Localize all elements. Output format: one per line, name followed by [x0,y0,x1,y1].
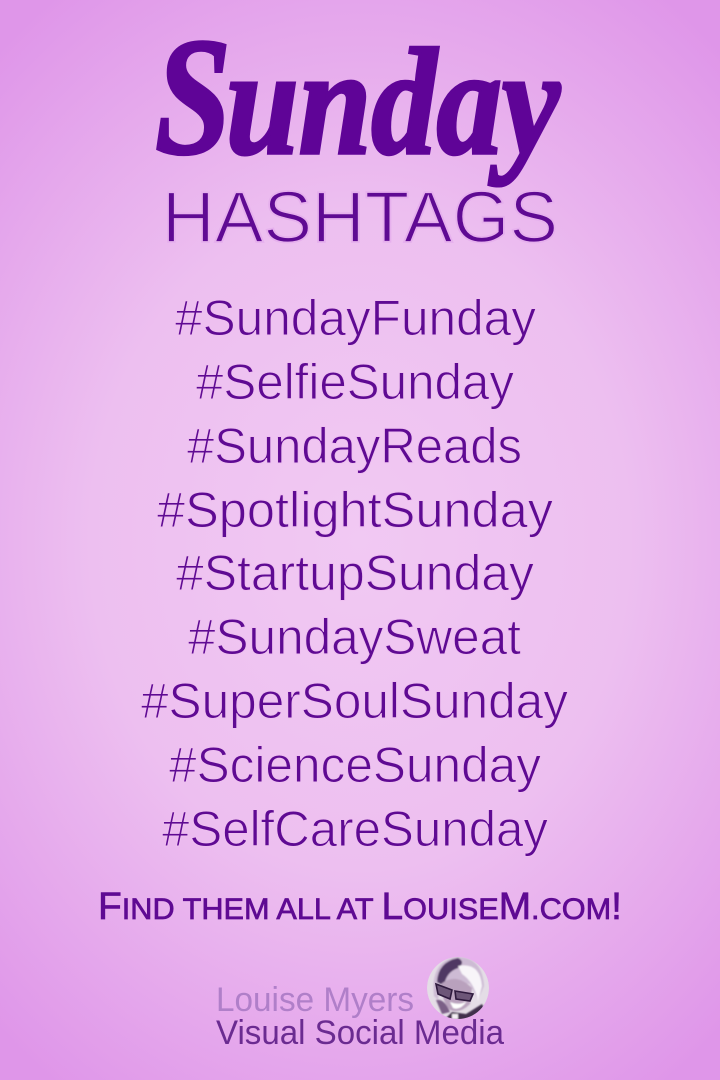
hashtag 3: #SundayReads [187,418,522,474]
hashtag list [141,290,568,857]
subtitle: HASHTAGS: HASHTAGS [162,178,558,258]
hashtag 2: #SelfieSunday [196,354,514,410]
title: Sunday: S [155,4,231,190]
hashtag 6: #SundaySweat [188,609,521,665]
hashtag 1: #SundayFunday [175,290,536,346]
logo: Louise Myers: Louise Myers [216,981,414,1019]
call to action: FIND THEM ALL AT LOUISEM.COM! [98,886,622,928]
hashtag 9: #SelfCareSunday [162,801,548,857]
icon: portrait avatar [427,957,490,1020]
hashtag 7: #SuperSoulSunday [141,673,568,729]
logo: Visual Social Media: Visual Social Media [216,1014,504,1052]
hashtag 4: #SpotlightSunday [157,482,553,538]
hashtag 8: #ScienceSunday [169,737,541,793]
hashtag 5: #StartupSunday [176,545,534,601]
title: Sunday [155,4,560,190]
title: Sunday: unday [226,18,560,186]
